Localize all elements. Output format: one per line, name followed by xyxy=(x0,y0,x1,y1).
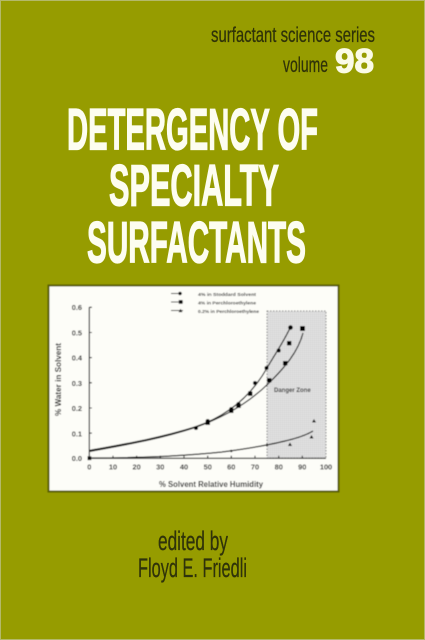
y axis tick labels: 0.3 xyxy=(72,379,82,388)
x axis tick labels xyxy=(87,462,332,472)
title: SPECIALTY xyxy=(109,154,279,218)
x axis tick labels: 80 xyxy=(275,462,283,472)
x axis tick labels: 20 xyxy=(132,462,141,472)
x axis tick labels: 60 xyxy=(227,462,235,472)
volume number: 98 xyxy=(335,42,374,80)
x axis title: % Solvent Relative Humidity xyxy=(159,480,264,489)
chart panel xyxy=(48,286,338,492)
legend xyxy=(171,292,259,315)
x axis tick labels: 100 xyxy=(320,462,332,472)
title xyxy=(67,98,318,276)
y axis tick labels: 0.0 xyxy=(72,454,82,463)
legend: 4% in Perchloroethylene xyxy=(198,300,256,306)
y axis tick labels: 0.4 xyxy=(72,354,83,362)
x axis tick labels: 50 xyxy=(204,462,212,472)
series label: volume xyxy=(283,54,328,77)
curves xyxy=(89,328,313,458)
data points: circles xyxy=(194,325,293,430)
x axis tick labels: 70 xyxy=(251,462,259,472)
y axis tick labels: 0.2 xyxy=(72,404,82,413)
y axis tick labels: 0.6 xyxy=(72,303,82,312)
axes xyxy=(89,307,326,458)
series label xyxy=(211,24,375,80)
x axis tick labels: 90 xyxy=(298,462,306,472)
x axis tick labels: 0 xyxy=(87,462,91,472)
legend: 4% in Stoddard Solvent xyxy=(198,292,256,298)
x axis tick labels: 30 xyxy=(156,462,164,472)
x axis tick labels: 40 xyxy=(180,462,188,472)
y axis tick labels: 0.1 xyxy=(72,430,82,438)
danger zone label: Danger Zone xyxy=(274,388,311,394)
editor credit xyxy=(138,526,247,583)
y axis tick labels: 0.5 xyxy=(72,328,82,338)
data points: squares xyxy=(206,326,305,425)
x axis tick labels: 10 xyxy=(109,462,117,472)
editor credit: edited by xyxy=(158,526,228,556)
y axis title: % Water in Solvent xyxy=(54,343,63,416)
legend: 0.2% in Perchloroethylene xyxy=(198,309,259,315)
y axis tick labels xyxy=(72,303,83,463)
editor credit: Floyd E. Friedli xyxy=(138,553,247,583)
data points: triangles xyxy=(88,419,316,460)
danger zone shaded region xyxy=(267,311,326,458)
